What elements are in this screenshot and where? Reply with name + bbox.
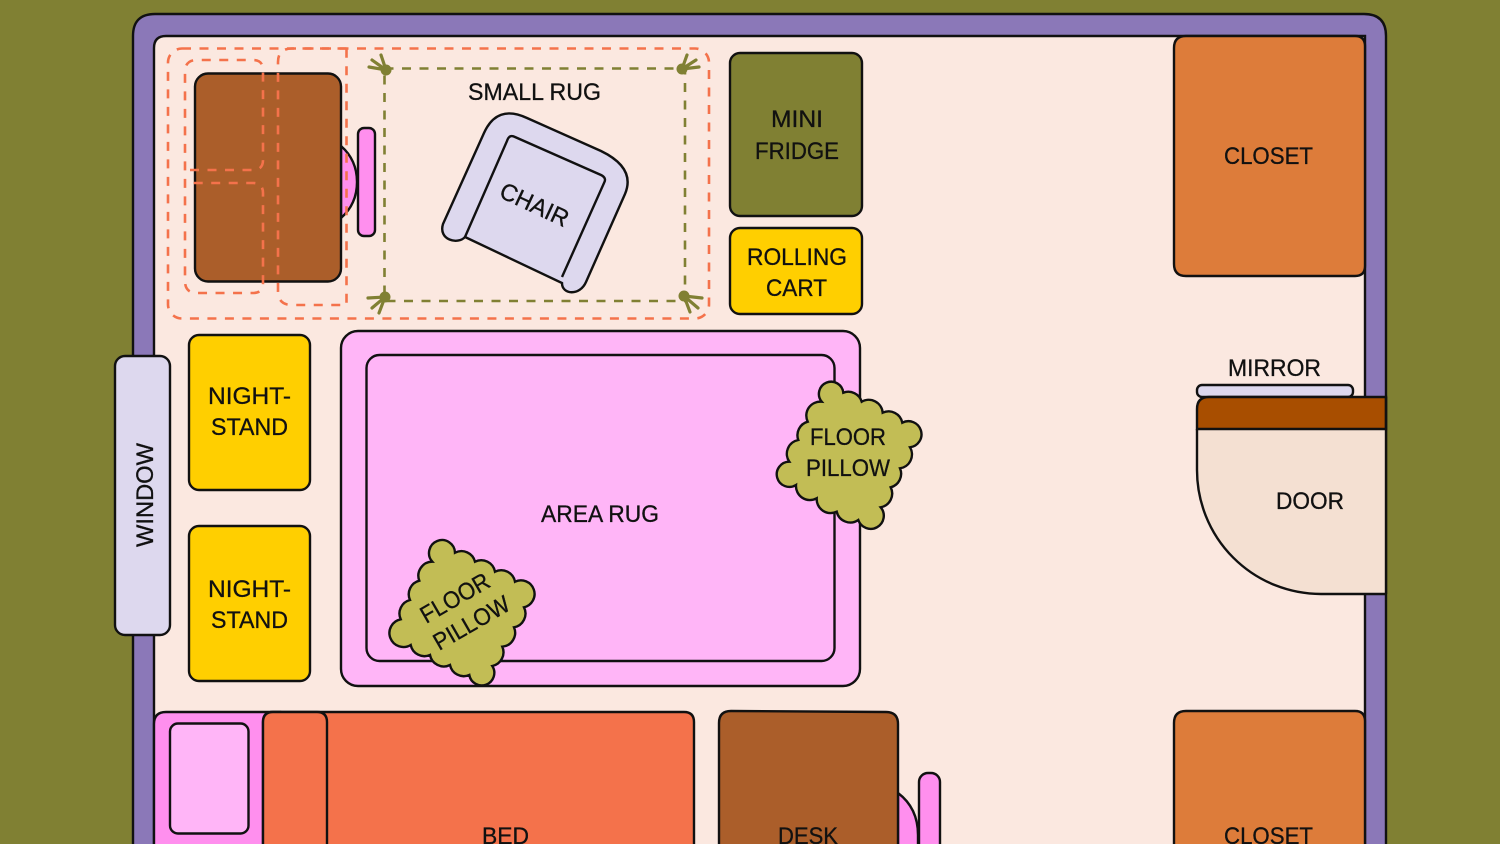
mirror (1197, 355, 1353, 397)
small rug outline with fringe (368, 55, 702, 313)
door frame (1197, 397, 1386, 429)
floor pillow right: FLOOR (810, 424, 886, 451)
nightstand two: NIGHT- (208, 576, 291, 603)
desk chair bottom (898, 773, 940, 844)
desk top (195, 74, 341, 282)
bed (154, 712, 694, 844)
floor pillow right: PILLOW (806, 455, 890, 482)
window (115, 356, 170, 635)
closet top (1174, 36, 1365, 276)
desk chair top (341, 128, 375, 236)
rolling cart (730, 228, 862, 314)
rolling cart: ROLLING (747, 244, 847, 271)
mirror: MIRROR (1228, 355, 1321, 382)
nightstand two: STAND (211, 607, 288, 634)
mini fridge: FRIDGE (755, 138, 839, 165)
mini fridge (730, 53, 862, 216)
right wall edge at door (1385, 397, 1387, 594)
orange dashed clearance outlines (168, 48, 709, 318)
rolling cart: CART (766, 275, 827, 302)
mini fridge: MINI (771, 106, 823, 133)
floor pillow left (389, 540, 535, 685)
floor pillow left: FLOOR (416, 568, 495, 629)
floor pillow left: PILLOW (429, 591, 515, 656)
closet top: CLOSET (1224, 143, 1313, 170)
area rug (341, 331, 860, 686)
area rug: AREA RUG (541, 501, 659, 528)
door swing: DOOR (1276, 488, 1344, 515)
chair: CHAIR (495, 178, 573, 233)
desk bottom (719, 711, 898, 844)
nightstand one (189, 335, 310, 490)
room floor (154, 36, 1365, 844)
chair (442, 113, 628, 292)
closet bottom (1174, 711, 1365, 844)
nightstand two (189, 526, 310, 681)
door swing (1197, 429, 1386, 594)
small rug outline with fringe: SMALL RUG (468, 79, 601, 106)
nightstand one: STAND (211, 414, 288, 441)
floor pillow right (777, 382, 921, 529)
nightstand one: NIGHT- (208, 383, 291, 410)
window: WINDOW (132, 443, 159, 547)
